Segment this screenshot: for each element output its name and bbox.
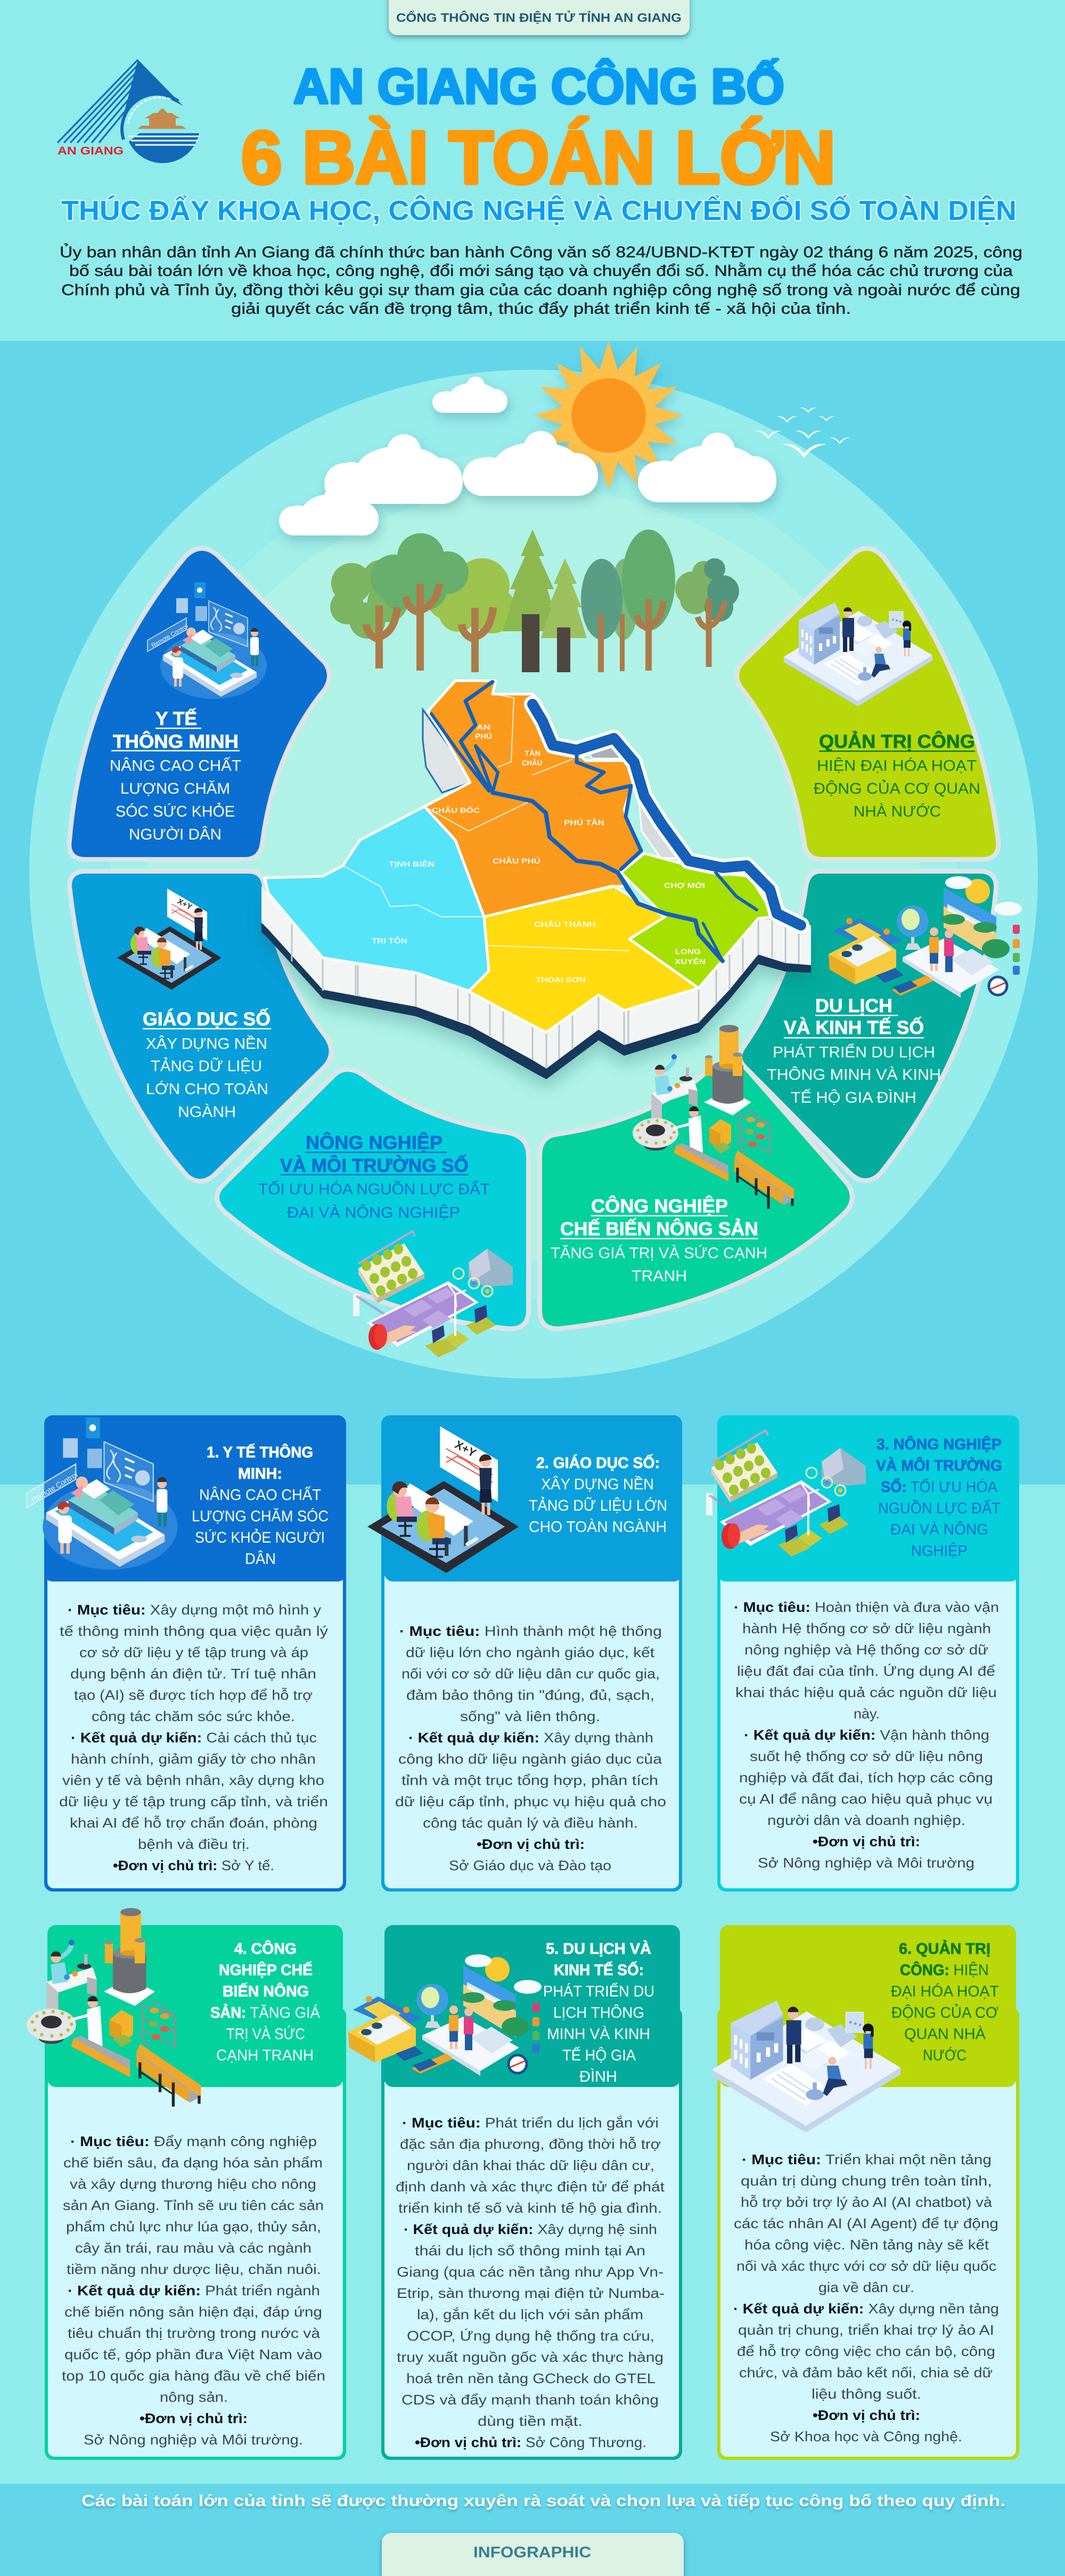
- card body text: thái du lịch số thông minh tại An: [415, 2243, 645, 2259]
- map of An Giang: [261, 681, 811, 1079]
- card body text: công kho dữ liệu ngành giáo dục của: [398, 1751, 662, 1767]
- card heading: LƯỢNG CHĂM SÓC: [192, 1507, 329, 1525]
- card heading: LỊCH THÔNG: [553, 2003, 644, 2021]
- card body text: định danh và xác thực điện tử để phát: [396, 2179, 665, 2195]
- card body text: · Kết quả dự kiến: Xây dựng thành: [408, 1730, 653, 1746]
- card body text: phẩm chủ lực như lúa gạo, thủy sản,: [66, 2219, 321, 2235]
- icon: sun: [534, 341, 683, 490]
- card body text: •Đơn vị chủ trì:: [140, 2410, 248, 2426]
- map labels: PHÚ TÂN: [564, 818, 604, 827]
- card body text: la), gắn kết du lịch với sản phẩm: [417, 2306, 643, 2322]
- card illustration: X+Y: [453, 1438, 479, 1460]
- map labels: AN: [477, 723, 490, 731]
- card body text: nông nghiệp và Hệ thống cơ sở dữ: [744, 1642, 988, 1658]
- panel text: LƯỢNG CHĂM: [120, 780, 230, 797]
- panel text: QUẢN TRỊ CÔNG: [819, 731, 975, 752]
- card body text: [59, 1602, 328, 1873]
- card heading: [891, 1939, 999, 2064]
- card heading: 3. NÔNG NGHIỆP: [876, 1435, 1002, 1453]
- panel text: XÂY DỰNG NỀN: [146, 1034, 267, 1053]
- background circles: [29, 370, 1038, 1379]
- card 4: Công nghiệp chế biến nông sản: [27, 1908, 346, 2460]
- card heading: 4. CÔNG: [234, 1939, 297, 1958]
- panel text: NGƯỜI DÂN: [129, 826, 222, 843]
- card body text: tiềm năng như dược liệu, chăn nuôi.: [67, 2261, 321, 2277]
- card illustration: [27, 1908, 201, 2107]
- panel: Quản trị công: [739, 551, 996, 857]
- panel text: NÂNG CAO CHẤT: [110, 756, 241, 775]
- map labels: THOẠI SƠN: [536, 975, 586, 984]
- card body text: Sở Khoa học và Công nghệ.: [770, 2428, 962, 2444]
- map labels: XUYÊN: [675, 957, 706, 966]
- card illustration: [712, 2001, 900, 2132]
- card body text: người dân khai thác dữ liệu dân cư,: [407, 2157, 654, 2173]
- card body text: [62, 2133, 325, 2448]
- panel: Du lịch và kinh tế số: [742, 874, 994, 1178]
- card heading: CẠNH TRANH: [216, 2047, 314, 2064]
- card heading: SẢN: TĂNG GIÁ: [210, 2003, 321, 2021]
- card body text: OCOP, Ứng dụng hệ thống tra cứu,: [407, 2328, 654, 2344]
- panel text: VÀ KINH TẾ SỐ: [784, 1017, 924, 1038]
- panel text: NÔNG NGHIỆP: [306, 1132, 443, 1153]
- panel text: TẾ HỘ GIA ĐÌNH: [791, 1088, 916, 1106]
- card heading: 1. Y TẾ THÔNG: [207, 1443, 313, 1461]
- card heading: NGHIỆP: [911, 1542, 968, 1560]
- card heading: CHO TOÀN NGÀNH: [529, 1518, 667, 1536]
- panel: Y tế thông minh: [71, 551, 327, 857]
- panel: Nông nghiệp và môi trường số: [219, 1072, 526, 1357]
- panel text: [258, 1132, 490, 1221]
- logo: An Giang: AN GIANG: [58, 145, 124, 157]
- panel: Giáo dục số: [72, 874, 329, 1179]
- card heading: ĐAI VÀ NÔNG: [890, 1520, 988, 1538]
- card body text: [733, 2151, 999, 2444]
- card body text: và xây dựng thương hiệu cho nông: [70, 2176, 316, 2192]
- card body text: chế biến nông sản hiện đại, đáp ứng: [64, 2304, 322, 2320]
- card heading: [529, 1454, 667, 1536]
- map labels: CHÂU ĐỐC: [432, 805, 480, 814]
- panel text: THÔNG MINH: [113, 731, 239, 752]
- card heading: XÂY DỰNG NỀN: [541, 1475, 654, 1493]
- card body text: •Đơn vị chủ trì: Sở Y tế.: [113, 1857, 274, 1873]
- card body text: đặc sản địa phương, đồng thời hỗ trợ: [400, 2136, 661, 2152]
- panel text: TĂNG GIÁ TRỊ VÀ SỨC CẠNH: [551, 1244, 767, 1262]
- card body text: gia về dân cư.: [818, 2279, 914, 2295]
- icon: agro-processing factory: [633, 1025, 794, 1209]
- card heading: SỨC KHỎE NGƯỜI: [195, 1528, 325, 1546]
- card body text: cụ AI để nâng cao hiệu quả phục vụ: [739, 1791, 993, 1807]
- map wall: [261, 886, 811, 1079]
- panel text: [551, 1195, 767, 1285]
- card body text: Giang (qua các nền tảng như App Vn-: [397, 2264, 663, 2280]
- card body text: hành Hệ thống cơ sở dữ liệu ngành: [742, 1620, 991, 1636]
- card body text: cơ sở dữ liệu y tế tập trung và áp: [79, 1644, 308, 1660]
- bottom tab: infographic: INFOGRAPHIC: [473, 2544, 591, 2561]
- card body text: khai thác hiệu quả các nguồn dữ liệu: [735, 1684, 997, 1700]
- card body text: sản An Giang. Tỉnh sẽ ưu tiên các sản: [63, 2197, 324, 2213]
- card body text: tế thông minh thông qua việc quản lý: [60, 1623, 328, 1639]
- card body text: đảm bảo thông tin "đúng, đủ, sạch,: [406, 1687, 654, 1703]
- card body text: quản trị dùng chung trên toàn tỉnh,: [741, 2173, 992, 2189]
- icon: digital classroom: X+Y: [176, 897, 194, 912]
- card body text: suốt hệ thống cơ sở dữ liệu nông: [750, 1748, 983, 1764]
- intro paragraph: giải quyết các vấn đề trọng tâm, thúc đẩy phát triển kinh tế - xã hội của tỉnh.: [231, 300, 851, 317]
- card heading: ĐÌNH: [579, 2068, 617, 2085]
- card body text: · Kết quả dự kiến: Vận hành thông: [744, 1727, 989, 1743]
- map labels: TRI TÔN: [372, 936, 407, 945]
- card body text: [396, 2115, 665, 2450]
- top source tab: CỔNG THÔNG TIN ĐIỆN TỬ TỈNH AN GIANG: [396, 10, 682, 25]
- title: [61, 59, 1017, 226]
- card body text: tạo (AI) sẽ được tích hợp để hỗ trợ: [74, 1687, 313, 1703]
- panel text: CÔNG NGHIỆP: [591, 1195, 728, 1217]
- card heading: NGUỒN LỰC ĐẤT: [878, 1499, 1001, 1517]
- card heading: VÀ MÔI TRƯỜNG: [876, 1456, 1002, 1474]
- panel text: DU LỊCH: [815, 996, 892, 1016]
- card body text: dữ liệu lớn cho ngành giáo dục, kết: [406, 1644, 655, 1660]
- card body text: hành chính, giảm giấy tờ cho nhân: [71, 1751, 316, 1767]
- card heading: MINH VÀ KINH: [547, 2025, 650, 2043]
- card body text: · Kết quả dự kiến: Xây dựng nền tảng: [733, 2301, 999, 2317]
- map labels: CHÂU PHÚ: [493, 856, 540, 865]
- map labels: TÂN: [525, 748, 540, 757]
- panel text: TRANH: [632, 1268, 687, 1285]
- panel text: [814, 731, 980, 820]
- card 2: Giáo dục số: [367, 1415, 682, 1892]
- panel text: CHẾ BIẾN NÔNG SẢN: [560, 1218, 758, 1240]
- card heading: PHÁT TRIỂN DU: [543, 1982, 654, 2000]
- card body text: · Mục tiêu: Đẩy mạnh công nghiệp: [70, 2133, 317, 2149]
- card body text: liệu đất đai của tỉnh. Ứng dụng AI để: [737, 1663, 995, 1679]
- map labels: CHỢ MỚI: [664, 881, 705, 890]
- card body text: nông sản.: [160, 2389, 228, 2405]
- panel text: VÀ MÔI TRƯỜNG SỐ: [280, 1155, 469, 1176]
- icon: smart healthcare: Remote Control: [150, 623, 189, 649]
- card heading: TẢNG DỮ LIỆU LỚN: [529, 1496, 667, 1514]
- card heading: ĐẠI HÓA HOẠT: [891, 1983, 999, 2000]
- card body text: · Kết quả dự kiến: Xây dựng hệ sinh: [404, 2221, 657, 2237]
- intro paragraph: Chính phủ và Tỉnh ủy, đồng thời kêu gọi sự tham gia của các doanh nghiệp công nghệ số trong và ngoài nước để cùng: [61, 282, 1020, 299]
- card body text: chức, và đảm bảo kết nối, chia sẻ dữ: [739, 2365, 993, 2381]
- icon: smart healthcare: [148, 582, 267, 699]
- card heading: KINH TẾ SỐ:: [554, 1961, 644, 1979]
- card body text: · Mục tiêu: Hình thành một hệ thống: [399, 1623, 662, 1639]
- card body text: triển kinh tế số và kinh tế hộ gia đình.: [398, 2200, 662, 2216]
- panel text: NGÀNH: [178, 1103, 236, 1121]
- map regions: [265, 681, 775, 1032]
- card heading: CÔNG: HIỆN: [900, 1961, 989, 1979]
- panel text: [110, 708, 241, 843]
- card heading: NƯỚC: [923, 2047, 966, 2064]
- panel text: SÓC SỨC KHỎE: [116, 802, 235, 820]
- logo: An Giang: [58, 60, 199, 163]
- card body text: · Mục tiêu: Hoàn thiện và đưa vào vận: [734, 1599, 999, 1615]
- card body text: •Đơn vị chủ trì:: [813, 1833, 920, 1849]
- card body text: [734, 1599, 999, 1871]
- card body text: · Mục tiêu: Xây dựng một mô hình y: [68, 1602, 321, 1618]
- card body text: hóa công việc. Nền tảng này sẽ kết: [744, 2237, 989, 2253]
- map labels: LONG: [675, 947, 701, 956]
- card body text: hoá trên nền tảng GCheck do GTEL: [406, 2370, 656, 2386]
- map labels: CHÂU: [522, 758, 542, 767]
- card body text: Sở Giáo dục và Đào tạo: [449, 1857, 611, 1873]
- card heading: [210, 1939, 321, 2064]
- card body text: Sở Nông nghiệp và Môi trường: [758, 1855, 974, 1871]
- card body text: dụng bệnh án điện tử. Trí tuệ nhân: [70, 1666, 316, 1682]
- card body text: nối với cơ sở dữ liệu dân cư quốc gia,: [402, 1666, 660, 1682]
- birds: [755, 407, 850, 458]
- panel text: PHÁT TRIỂN DU LỊCH: [773, 1043, 935, 1061]
- card body text: Etrip, sàn thương mại điện tử Numba-: [397, 2285, 665, 2301]
- card 1: Y tế thông minh: [27, 1415, 346, 1892]
- card illustration: [348, 1954, 542, 2076]
- card heading: QUAN NHÀ: [904, 2025, 986, 2043]
- card body text: Sở Nông nghiệp và Môi trường.: [84, 2432, 303, 2448]
- card illustration: Remote Control: [30, 1470, 79, 1504]
- panel text: THÔNG MINH VÀ KINH: [767, 1065, 941, 1083]
- intro paragraph: bố sáu bài toán lớn về khoa học, công nghệ, đổi mới sáng tạo và chuyển đổi số. Nhằm cụ thể hóa các chủ trương của: [69, 262, 1013, 280]
- card heading: 2. GIÁO DỤC SỐ:: [536, 1454, 660, 1472]
- card body text: •Đơn vị chủ trì:: [477, 1836, 585, 1852]
- card heading: 6. QUẢN TRỊ: [899, 1939, 990, 1958]
- card body text: CDS và đẩy mạnh thanh toán không: [402, 2392, 659, 2408]
- card 6: Quản trị công: [712, 1925, 1019, 2460]
- panel text: LỚN CHO TOÀN: [146, 1080, 268, 1098]
- card heading: 5. DU LỊCH VÀ: [546, 1939, 651, 1958]
- card heading: MINH:: [238, 1465, 282, 1482]
- rivers: [431, 682, 801, 961]
- card body text: viên y tế và bệnh nhân, xây dựng kho: [62, 1772, 324, 1788]
- card body text: hỗ trợ bởi trợ lý ảo AI (AI chatbot) và: [741, 2194, 993, 2210]
- card body text: tỉnh và một trục tổng hợp, phân tích: [402, 1772, 658, 1788]
- top source tab: [389, 0, 690, 35]
- panel text: ĐỘNG CỦA CƠ QUAN: [814, 779, 980, 797]
- icon: public administration: [784, 602, 932, 706]
- card heading: NÂNG CAO CHẤT: [199, 1486, 321, 1504]
- card body text: · Mục tiêu: Triển khai một nền tảng: [742, 2151, 992, 2167]
- card body text: sống" và liên thông.: [460, 1708, 600, 1724]
- panel text: Y TẾ: [155, 708, 197, 729]
- panel: Công nghiệp chế biến nông sản: [542, 1068, 850, 1326]
- icon: digital tourism: [829, 876, 1022, 998]
- card body text: dùng tiền mặt.: [478, 2413, 583, 2429]
- card illustration: [367, 1426, 519, 1573]
- card body text: tiêu chuẩn thị trường trong nước và: [68, 2325, 321, 2341]
- card heading: BIẾN NÔNG: [223, 1982, 309, 2000]
- card body text: người dân và doanh nghiệp.: [767, 1812, 965, 1828]
- card body text: để hỗ trợ công việc cho cán bộ, công: [737, 2343, 995, 2359]
- card body text: [395, 1623, 666, 1873]
- card heading: TRỊ VÀ SỨC: [226, 2025, 305, 2043]
- card body text: các tác nhân AI (AI Agent) để tự động: [734, 2215, 998, 2231]
- clouds: [279, 377, 776, 535]
- card body text: dữ liệu cấp tỉnh, phục vụ hiệu quả cho: [395, 1794, 666, 1809]
- card heading: TẾ HỘ GIA: [562, 2046, 636, 2064]
- card body text: quốc tế, góp phần đưa Việt Nam vào: [64, 2346, 322, 2362]
- card body text: công tác quản lý và điều hành.: [423, 1815, 638, 1831]
- title: THÚC ĐẨY KHOA HỌC, CÔNG NGHỆ VÀ CHUYỂN ĐỔI SỐ TOÀN DIỆN: [61, 195, 1017, 226]
- icon: digital classroom: [117, 888, 222, 990]
- card body text: •Đơn vị chủ trì: Sở Công Thương.: [415, 2434, 646, 2450]
- card body text: nối và xác thực với cơ sở dữ liệu quốc: [736, 2258, 996, 2274]
- panel text: TỐI ƯU HÓA NGUỒN LỰC ĐẤT: [258, 1180, 490, 1198]
- card heading: [876, 1435, 1002, 1560]
- trees: [330, 529, 739, 672]
- icon: smart agriculture: [353, 1231, 513, 1357]
- card body text: khai AI để hỗ trợ chẩn đoán, phòng: [70, 1815, 317, 1831]
- card heading: SỐ: TỐI ƯU HÓA: [881, 1478, 998, 1496]
- card body text: nghiệp và đất đai, tích hợp các công: [739, 1770, 993, 1786]
- card body text: top 10 quốc gia hàng đầu về chế biến: [62, 2368, 325, 2384]
- card body text: truy xuất nguồn gốc và xác thực hàng: [397, 2349, 663, 2365]
- title: 6 BÀI TOÁN LỚN: [241, 116, 835, 199]
- card body text: liệu thông suốt.: [812, 2386, 921, 2402]
- card heading: ĐỘNG CỦA CƠ: [891, 2003, 998, 2021]
- card body text: · Kết quả dự kiến: Phát triển ngành: [68, 2282, 320, 2298]
- card heading: [543, 1939, 654, 2085]
- panel text: [143, 1008, 271, 1121]
- map labels: PHÚ: [475, 731, 492, 740]
- card body text: •Đơn vị chủ trì:: [813, 2407, 920, 2423]
- card illustration: [706, 1430, 866, 1556]
- card body text: cây ăn trái, rau màu và các ngành: [75, 2240, 312, 2256]
- card heading: [192, 1443, 329, 1568]
- card body text: quản trị chung, triển khai trợ lý ảo AI: [738, 2322, 994, 2338]
- card illustration: [27, 1417, 177, 1570]
- intro paragraph: [60, 243, 1022, 317]
- footer note: Các bài toán lớn của tỉnh sẽ được thường xuyên rà soát và chọn lựa và tiếp tục công bố theo quy định.: [81, 2491, 1005, 2510]
- card 5: Du lịch và kinh tế số: [348, 1925, 682, 2460]
- card 3: Nông nghiệp và môi trường số: [706, 1415, 1019, 1892]
- panel text: GIÁO DỤC SỐ: [143, 1008, 271, 1030]
- panel text: TẢNG DỮ LIỆU: [151, 1057, 262, 1075]
- card body text: này.: [854, 1706, 880, 1722]
- card body text: chế biến sâu, đa dạng hóa sản phẩm: [63, 2155, 323, 2171]
- panel text: NHÀ NƯỚC: [854, 803, 941, 820]
- card body text: dữ liệu y tế tập trung cấp tỉnh, và triển: [59, 1794, 328, 1809]
- card body text: công tác chăm sóc sức khỏe.: [92, 1708, 295, 1724]
- panel text: ĐAI VÀ NÔNG NGHIỆP: [287, 1203, 460, 1221]
- panel text: HIỆN ĐẠI HÓA HOẠT: [817, 757, 977, 775]
- bottom tab: infographic: [382, 2533, 684, 2576]
- title: AN GIANG CÔNG BỐ: [293, 59, 784, 114]
- map labels: [372, 723, 706, 984]
- card body text: · Kết quả dự kiến: Cải cách thủ tục: [71, 1730, 317, 1746]
- card heading: NGHIỆP CHẾ: [219, 1961, 313, 1979]
- intro paragraph: Ủy ban nhân dân tỉnh An Giang đã chính thức ban hành Công văn số 824/UBND-KTĐT ngày 02 tháng 6 năm 2025, công: [60, 243, 1022, 261]
- map labels: CHÂU THÀNH: [534, 919, 596, 928]
- card body text: bệnh và điều trị.: [138, 1836, 250, 1852]
- map labels: TỊNH BIÊN: [389, 859, 435, 868]
- panel text: [767, 996, 941, 1106]
- card heading: DÂN: [245, 1550, 276, 1568]
- card body text: · Mục tiêu: Phát triển du lịch gắn với: [402, 2115, 659, 2131]
